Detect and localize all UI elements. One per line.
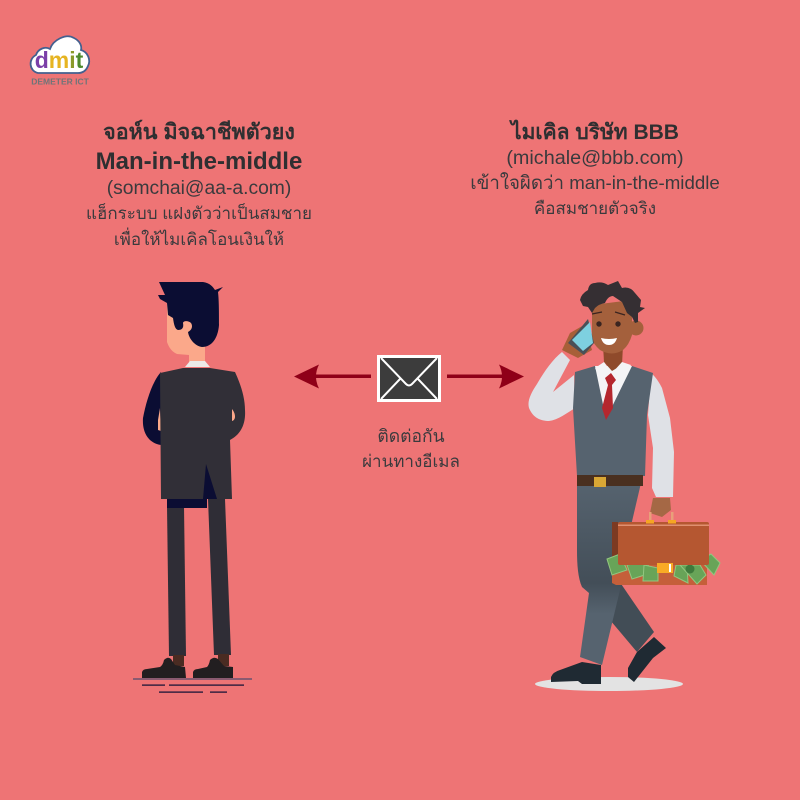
heading: victim text block: เข้าใจผิดว่า man-in-the-middle (470, 172, 720, 193)
heading: victim text block (470, 119, 720, 218)
legs (167, 506, 186, 656)
illustration: attacker seen from behind (133, 282, 252, 693)
front leg (577, 483, 641, 665)
skin and neck (167, 300, 205, 366)
vest (573, 366, 653, 476)
back leg (610, 575, 654, 652)
coat (160, 368, 245, 499)
hand (562, 325, 592, 358)
heading: attacker text block: (somchai@aa-a.com) (107, 178, 291, 199)
hand on handle (650, 498, 671, 517)
collar (185, 361, 210, 367)
ground lines (133, 678, 252, 693)
illustration: victim with phone and briefcase (528, 281, 720, 691)
heading: victim text block: คือสมชายตัวจริง (534, 199, 656, 218)
caption: contact through email: ติดต่อกัน (377, 426, 445, 446)
shirt (595, 366, 632, 420)
under-coat (167, 498, 207, 508)
heading: attacker text block: จอห์น มิจฉาชีพตัวยง (103, 119, 295, 144)
front shoe (551, 662, 601, 684)
money (607, 554, 720, 584)
icon: left arrow (294, 364, 371, 388)
coat slit (203, 464, 217, 499)
hair (158, 282, 223, 347)
caption: contact through email: ผ่านทางอีเมล (362, 452, 460, 471)
icon: right arrow (447, 364, 524, 388)
neck (603, 345, 623, 371)
hair (580, 281, 645, 323)
briefcase (607, 512, 720, 585)
tie (602, 373, 616, 420)
heading: attacker text block (86, 119, 312, 249)
collar (595, 362, 612, 390)
shadow (535, 677, 683, 691)
shoes (142, 658, 186, 678)
head (592, 300, 632, 354)
left sleeve (143, 372, 161, 445)
right sleeve (648, 373, 674, 497)
belt (577, 475, 643, 486)
icon: envelope (377, 355, 441, 402)
logo: dmit cloud (31, 36, 90, 86)
caption: contact through email (362, 426, 460, 471)
phone (568, 319, 594, 355)
logo: dmit cloud: dmit (35, 47, 84, 73)
heading: attacker text block: Man-in-the-middle (96, 148, 302, 175)
heading: attacker text block: แฮ็กระบบ แฝงตัวว่าเป็นสมชาย (86, 202, 312, 223)
heading: victim text block: ไมเคิล บริษัท BBB (509, 119, 679, 144)
ankles (173, 655, 184, 666)
logo: dmit cloud: DEMETER ICT (31, 76, 90, 86)
heading: attacker text block: เพื่อให้ไมเคิลโอนเงินให้ (114, 227, 284, 249)
brows, eyes and mouth (592, 312, 625, 315)
left sleeve (528, 352, 575, 421)
back shoe (628, 637, 666, 682)
heading: victim text block: (michale@bbb.com) (506, 147, 684, 169)
